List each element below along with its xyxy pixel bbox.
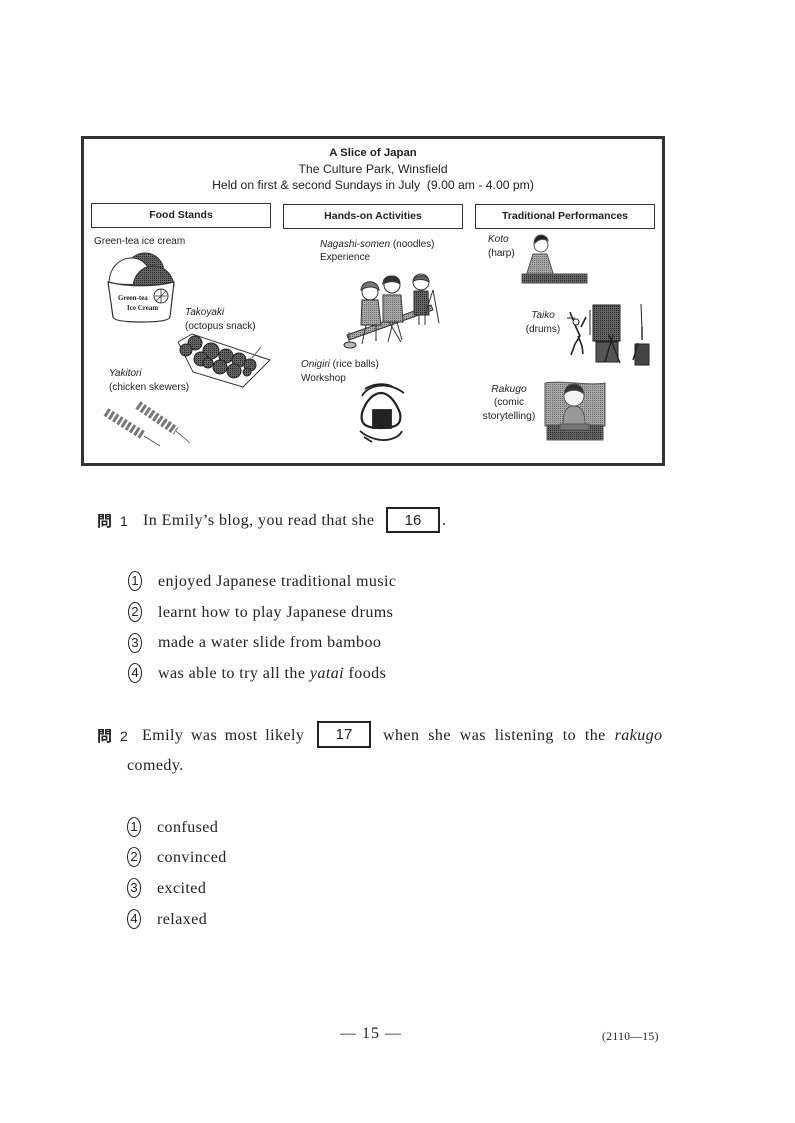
heading: hands-on activities [283, 204, 463, 229]
label: nagashi-somen: Nagashi-somen (noodles) [320, 239, 435, 250]
label: koto: (harp) [488, 248, 515, 258]
label: nagashi-somen: Experience [320, 252, 370, 263]
question 1: In Emily’s blog, you read that she [143, 512, 374, 529]
option 1-2 text: learnt how to play Japanese drums [158, 604, 393, 621]
label: koto: Koto [488, 234, 509, 245]
label: rakugo: storytelling) [483, 411, 535, 422]
option 2-1 marker [127, 817, 141, 837]
option 2-1 text: confused [157, 819, 218, 836]
label: takoyaki [185, 307, 256, 332]
question 2 start: 2 [120, 728, 128, 744]
option 1-1 marker [128, 571, 142, 591]
label: taiko: (drums) [526, 324, 560, 335]
label: rakugo: (comic [494, 397, 524, 408]
poster title: A Slice of Japan [329, 147, 417, 159]
label: onigiri: Workshop [301, 373, 346, 384]
icon: ice cream cup: Ice Cream [127, 304, 158, 312]
question 2 continuation: when she was listening to the rakugo [383, 727, 663, 744]
option 2-3 marker: 3 [130, 880, 138, 895]
option 1-3 marker: 3 [131, 635, 139, 650]
page number: — 15 — [340, 1025, 402, 1042]
answer box 16 [386, 507, 440, 533]
label: rakugo [483, 384, 535, 422]
answer box 17: 17 [336, 726, 352, 743]
option 2-1 marker: 1 [130, 819, 138, 834]
label: nagashi-somen [320, 239, 435, 263]
option 1-4 marker [128, 663, 142, 683]
option 2-2 marker [127, 847, 141, 867]
heading: food stands [91, 203, 271, 228]
option 1-3 marker [128, 633, 142, 653]
option 1-4 marker: 4 [131, 665, 139, 680]
answer box 17 [317, 721, 371, 748]
poster venue: The Culture Park, Winsfield [298, 162, 448, 176]
label: onigiri: Onigiri (rice balls) [301, 359, 379, 370]
heading: hands-on activities: Hands-on Activities [324, 210, 422, 222]
option 1-2 marker [128, 602, 142, 622]
label: koto [488, 234, 515, 258]
option 2-2 marker: 2 [130, 849, 138, 864]
option 2-3 marker [127, 878, 141, 898]
label: yakitori: Yakitori [109, 368, 142, 379]
option 1-1 text: enjoyed Japanese traditional music [158, 573, 396, 590]
option 2-4 marker: 4 [130, 911, 138, 926]
option 1-1 marker: 1 [131, 573, 139, 588]
label: taiko: Taiko [531, 310, 555, 321]
label: taiko [526, 310, 560, 335]
question 1 [97, 510, 374, 531]
option 1-4 text: was able to try all the yatai foods [158, 665, 386, 682]
option 1-2 marker: 2 [131, 604, 139, 619]
answer box 16: 16 [405, 512, 421, 529]
label: takoyaki: Takoyaki [185, 307, 224, 318]
question 2 start: Emily was most likely [142, 727, 304, 744]
exam code: (2110—15) [602, 1031, 659, 1043]
label: onigiri [301, 359, 379, 384]
heading: traditional performances [475, 204, 655, 229]
poster dates: Held on first & second Sundays in July (9.00 am - 4.00 pm) [212, 178, 534, 192]
icon: ice cream cup: Green-tea [118, 294, 148, 302]
question 2 start [97, 725, 304, 746]
question 2 second line: comedy. [127, 757, 184, 774]
option 1-3 text: made a water slide from bamboo [158, 634, 381, 651]
question 2 start: 問 [97, 725, 112, 746]
heading: traditional performances: Traditional Performances [502, 210, 628, 222]
label: yakitori: (chicken skewers) [109, 382, 189, 393]
question 1: 問 [97, 510, 112, 531]
label: yakitori [109, 368, 189, 393]
label: green-tea ice cream: Green-tea ice cream [94, 236, 185, 247]
label: takoyaki: (octopus snack) [185, 321, 256, 332]
option 2-2 text: convinced [157, 849, 227, 866]
option 2-4 marker [127, 909, 141, 929]
heading: food stands: Food Stands [149, 209, 213, 221]
option 2-4 text: relaxed [157, 911, 207, 928]
panel: event poster [81, 136, 665, 466]
label: rakugo: Rakugo [491, 384, 527, 395]
option 2-3 text: excited [157, 880, 206, 897]
question 1: 1 [120, 513, 128, 529]
question 1 period: . [442, 512, 446, 529]
